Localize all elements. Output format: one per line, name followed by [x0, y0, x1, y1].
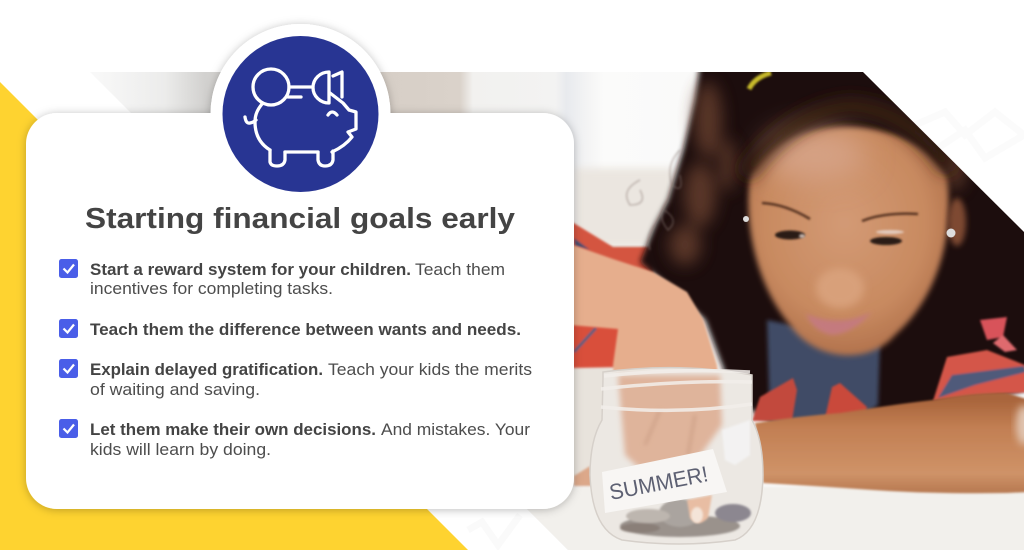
item 4: And mistakes. Your	[381, 421, 531, 439]
icon: checkbox	[59, 359, 78, 378]
item 3: Teach your kids the merits	[328, 361, 532, 379]
eyebrows	[762, 203, 918, 221]
shirt below arm	[574, 324, 620, 370]
item 3: of waiting and saving.	[90, 381, 260, 399]
neck glass bands	[601, 371, 752, 410]
hairline	[745, 106, 950, 175]
face	[748, 127, 949, 355]
right forearm	[755, 393, 1024, 493]
chevron pattern: top right	[915, 112, 1024, 158]
item 4	[59, 419, 531, 459]
jar label: SUMMER!	[607, 461, 710, 505]
forehead shine	[765, 129, 865, 181]
finger gaps	[646, 412, 696, 452]
left arm and hand	[574, 244, 719, 370]
icon: checkbox	[59, 319, 78, 338]
glass jar	[590, 368, 763, 544]
item 2: Teach them the difference between wants and needs.	[90, 321, 521, 339]
badge ring	[210, 24, 390, 204]
hair curls highlights	[669, 82, 965, 265]
far skin patch	[574, 466, 592, 486]
icon badge: piggy bank	[210, 24, 390, 204]
item 4: kids will learn by doing.	[90, 441, 271, 459]
right ear	[948, 198, 966, 246]
flyaway curls	[627, 150, 681, 250]
shirt red panels	[752, 317, 1024, 421]
item 3: Explain delayed gratification.	[90, 361, 323, 379]
icon: checkbox	[59, 419, 78, 438]
item 1: Start a reward system for your children.	[90, 261, 411, 279]
white card panel	[26, 113, 574, 509]
chevron pattern: bottom	[468, 515, 520, 545]
earrings	[743, 216, 956, 238]
hair tie	[749, 73, 771, 89]
badge shadow ring	[206, 20, 394, 113]
mouth	[806, 312, 872, 335]
item 1: Teach them	[415, 261, 505, 279]
badge disc	[222, 36, 378, 192]
glass reflection	[722, 420, 750, 465]
item 1	[59, 259, 505, 298]
jar body	[590, 368, 763, 544]
shirt collar and front	[767, 320, 880, 424]
nose	[816, 268, 864, 308]
hair	[640, 50, 1024, 425]
fingertip	[687, 495, 712, 523]
item 1: incentives for completing tasks.	[90, 280, 333, 298]
fingers inside jar	[618, 375, 722, 478]
icon: checkbox	[59, 259, 78, 278]
wall shade	[574, 168, 674, 248]
photo background	[101, 72, 1024, 487]
jar label	[602, 449, 727, 513]
icon: pig	[245, 69, 356, 166]
eye shine	[799, 230, 904, 238]
shirt above arm	[574, 221, 654, 274]
yellow corner background	[0, 82, 468, 550]
eyes	[775, 230, 902, 245]
checklist	[59, 259, 532, 459]
item 3	[59, 359, 532, 399]
elbow highlight	[1016, 405, 1024, 445]
heading: Starting financial goals early	[85, 203, 515, 235]
table top	[564, 488, 1024, 550]
coins	[620, 499, 751, 537]
item 4: Let them make their own decisions.	[90, 421, 376, 439]
